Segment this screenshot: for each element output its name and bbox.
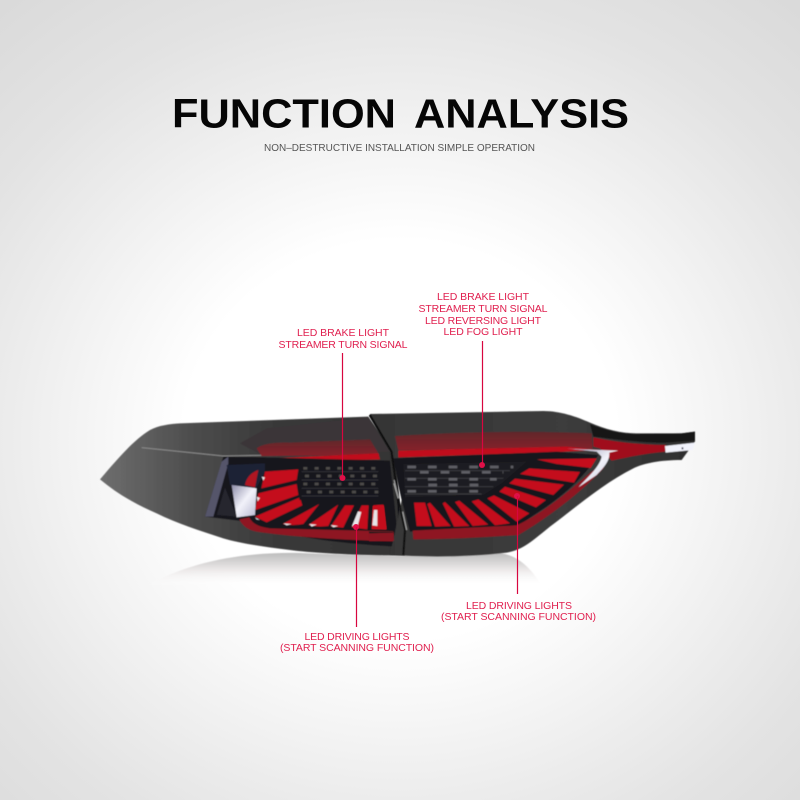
LED cluster [403,462,527,497]
white LED tip [372,510,377,526]
callout: lower left [280,524,434,654]
bright red strip [398,447,600,457]
top dark strip [590,424,695,443]
left lamp end [367,506,394,541]
callout: lower right: (START SCANNING FUNCTION) [441,611,596,623]
callout: lower right [441,493,596,623]
tip red section [593,437,666,461]
smoked red band [395,432,593,450]
callout: upper left: STREAMER TURN SIGNAL [278,339,408,351]
white LED tips [255,477,377,527]
floor reflection [146,553,542,586]
red fins [371,458,597,529]
callout: upper right: LED FOG LIGHT [444,326,523,338]
callout: upper left [278,327,408,481]
smoked red band [257,439,379,456]
lamp body [100,417,405,555]
right tail lamp [367,411,695,556]
callout: upper right [418,291,548,468]
subtitle: NON–DESTRUCTIVE INSTALLATION SIMPLE OPERATION [264,142,535,154]
callout: lower left: LED DRIVING LIGHTS [304,631,410,643]
callout: upper right: STREAMER TURN SIGNAL [418,303,548,315]
title [172,90,629,136]
callout: upper right: LED BRAKE LIGHT [437,291,530,303]
bright red strip [265,453,380,462]
chrome reflector [205,457,228,517]
inner dark housing [393,452,598,532]
title: ANALYSIS [414,90,629,136]
red fins [255,469,386,529]
lamp separator [370,415,402,554]
lower red band [239,517,394,541]
callout: upper left: LED BRAKE LIGHT [297,327,390,339]
LED cluster [299,465,381,500]
left tail lamp [100,415,405,555]
callout: lower right: LED DRIVING LIGHTS [466,600,572,612]
callout: lower left: (START SCANNING FUNCTION) [280,642,434,654]
inner dark housing [205,457,398,547]
lower red band [413,466,604,539]
chrome trim [567,449,618,487]
lamp body [370,411,695,556]
white chrome tip [665,443,695,453]
title: FUNCTION [172,90,396,136]
callout: upper right: LED REVERSING LIGHT [425,315,542,327]
lamp separator [370,415,405,555]
